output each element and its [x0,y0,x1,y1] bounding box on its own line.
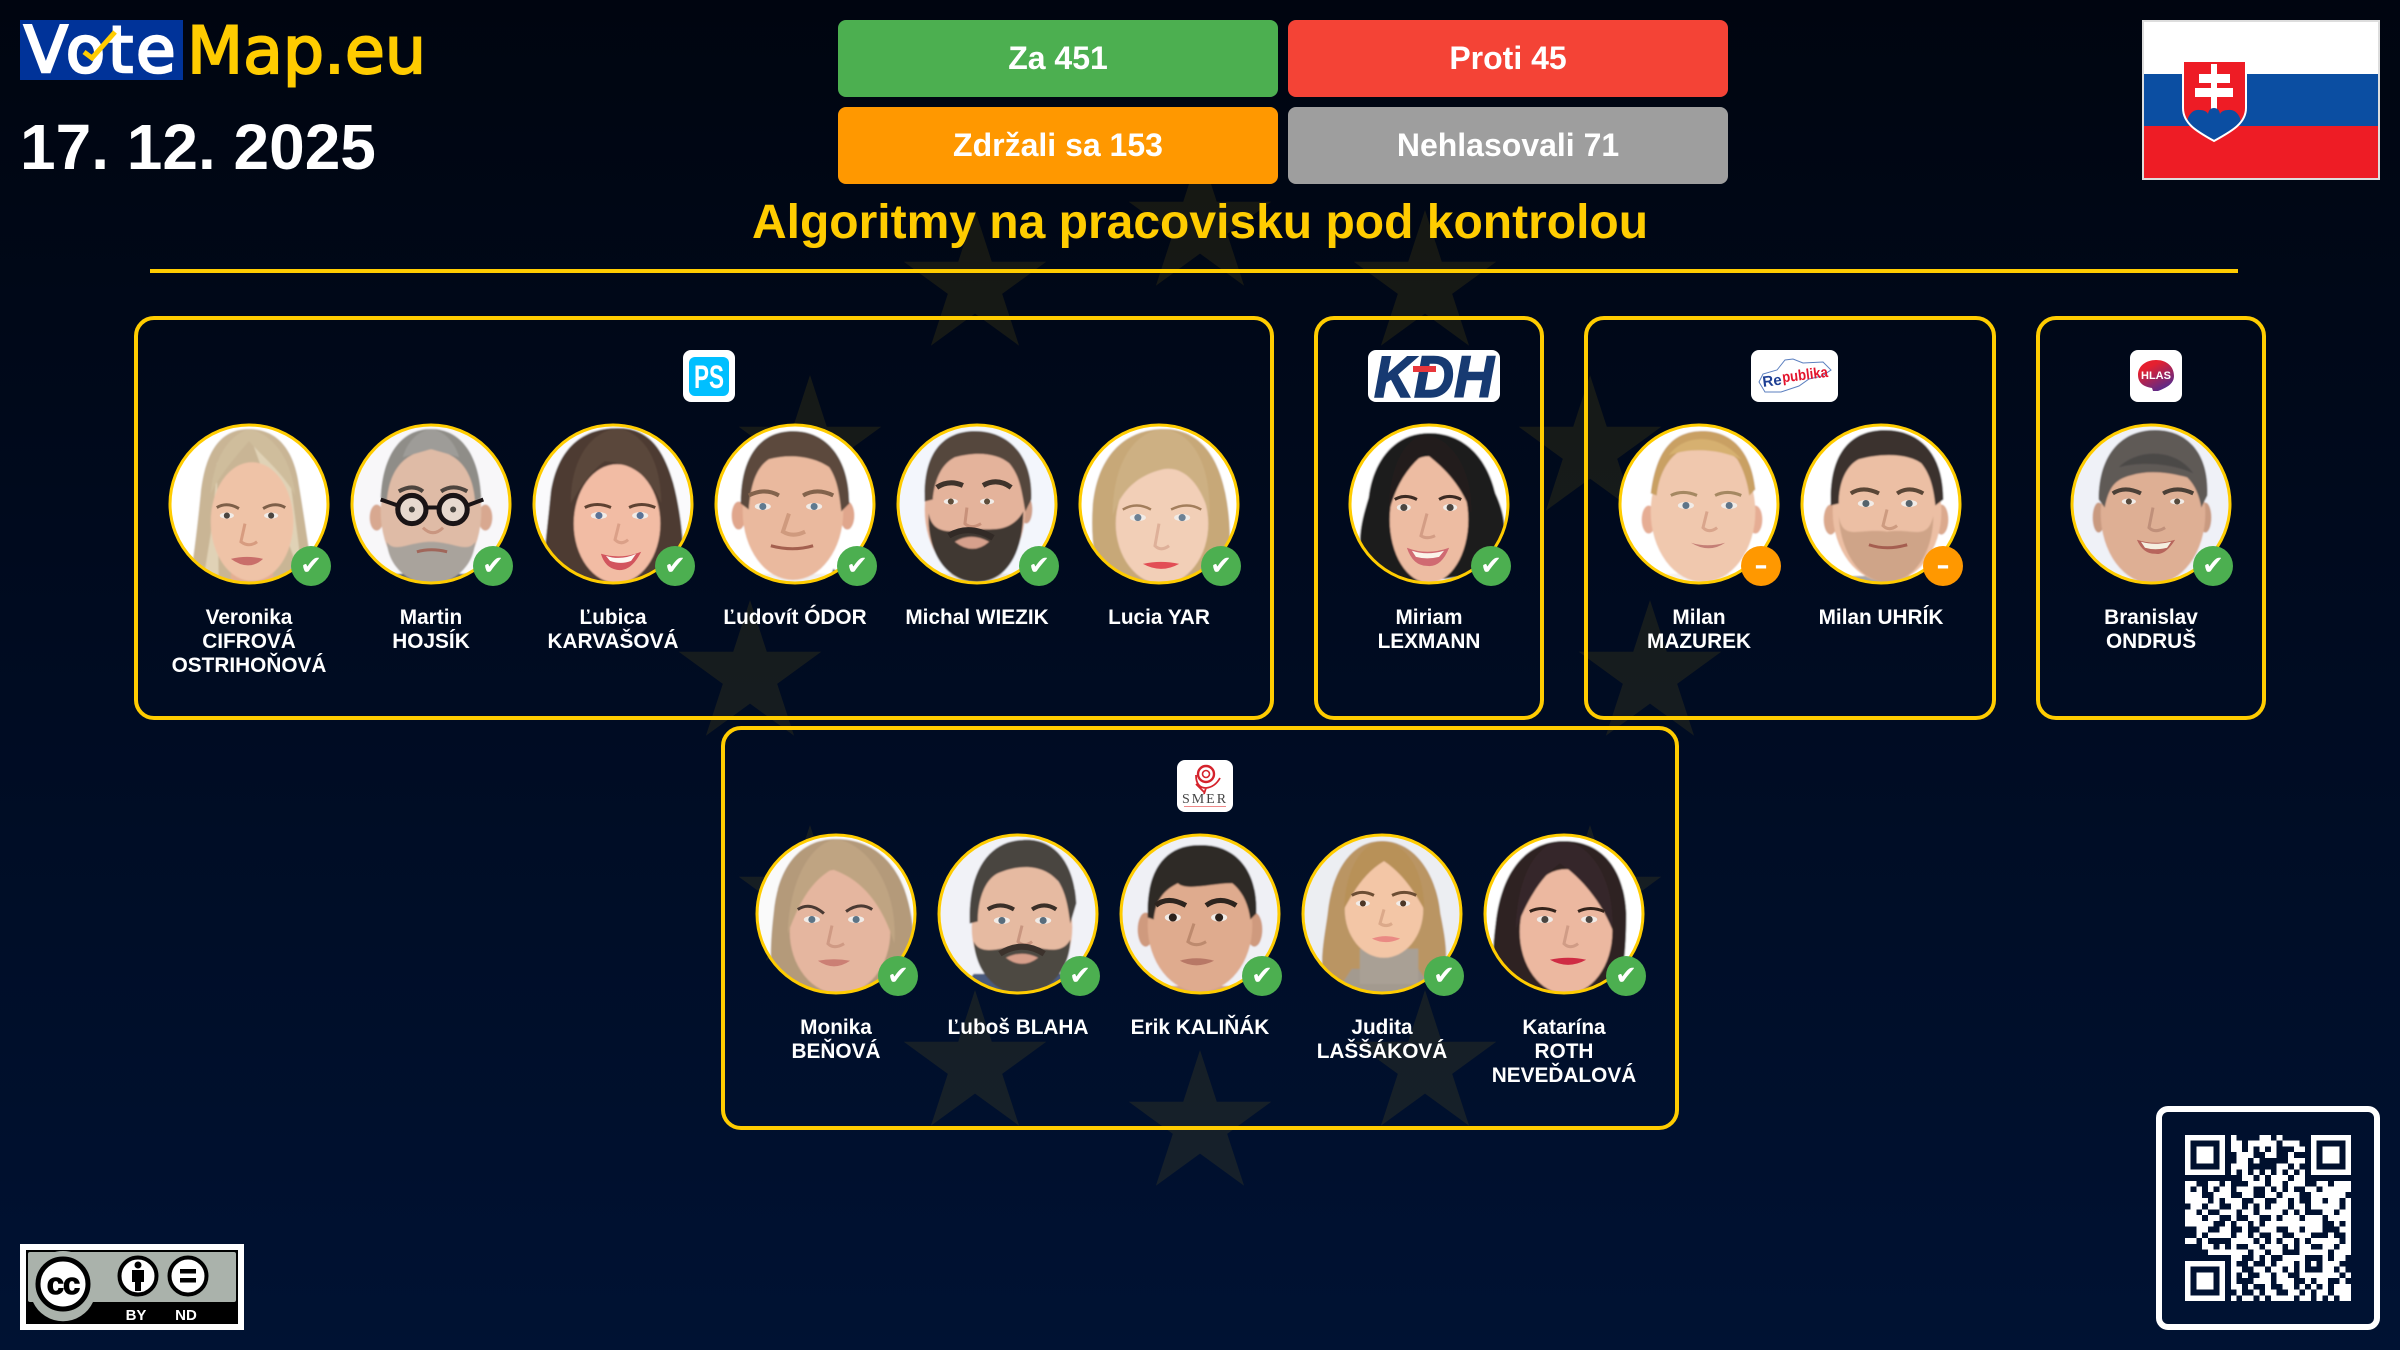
name: Milan UHRÍK [1819,606,1943,629]
name: Martin [400,606,462,629]
member: Milan Uhrík [1800,424,1963,629]
photo [1078,424,1240,584]
member: Monika Beňová [756,834,918,1063]
member: Milan Mazurek [1618,424,1781,653]
party logo: PS [683,350,735,402]
name: CIFROVÁ [202,630,296,653]
name: ONDRUŠ [2106,630,2196,653]
photo [1348,424,1510,584]
name: Michal WIEZIK [905,606,1049,629]
name [1492,1016,1636,1087]
party logo: Hlas: HLAS [2141,370,2171,382]
vote badge: for: ✔ [1480,551,1502,581]
vote badge: for: ✔ [664,551,686,581]
photo [1800,424,1962,584]
name: LAŠŠÁKOVÁ [1317,1040,1447,1063]
name [1317,1016,1447,1063]
member: Katarína Roth Neveďalová [1484,834,1646,1087]
name: Milan [1672,606,1726,629]
CC BY-ND licence badge [20,1244,244,1330]
name: Ľuboš BLAHA [948,1016,1088,1039]
button: for: Za 451 [1008,40,1108,76]
name: NEVEĎALOVÁ [1492,1064,1636,1087]
vote badge: for [473,546,513,586]
name: BEŇOVÁ [792,1040,880,1063]
name: Ľubica [579,606,647,629]
name: Monika [800,1016,872,1039]
name [392,606,470,653]
logo: VoteMap.eu: Vote [24,14,178,88]
vote badge: for: ✔ [300,551,322,581]
panel: Hlas [2036,316,2266,720]
photo [532,424,694,584]
vote badge: for [1019,546,1059,586]
name: Branislav [2104,606,2198,629]
name [792,1016,880,1063]
panel: PS [134,316,1274,720]
photo [168,424,330,584]
vote badge: for [291,546,331,586]
vote badge: abstained: – [1936,551,1950,581]
vote badge: for: ✔ [2202,551,2224,581]
vote badge: for [837,546,877,586]
vote badge: for: ✔ [887,961,909,991]
panel: Republika [1584,316,1996,720]
photo [896,424,1058,584]
member: Ľudovít Ódor [714,424,877,629]
member: Judita Laššáková [1302,834,1464,1063]
QR code [2156,1106,2380,1330]
vote badge: for: ✔ [482,551,504,581]
vote badge: for [655,546,695,586]
member: Erik Kaliňák [1120,834,1282,1039]
vote badge: abstained [1923,546,1963,586]
CC BY-ND licence badge: cc [47,1266,80,1301]
party logo: Smer: SMER [1182,792,1228,807]
vote badge: for [1606,956,1646,996]
name: Judita [1351,1016,1413,1039]
party logo: Smer [1177,760,1233,812]
photo [1120,834,1280,994]
button: for [838,20,1278,97]
name: Ľudovít ÓDOR [723,606,867,629]
divider rule [150,269,2238,273]
photo [1302,834,1462,994]
photo [350,424,512,584]
vote counts [838,20,1728,184]
vote badge: for [1471,546,1511,586]
member: Branislav Ondruš [2070,424,2233,653]
button: against: Proti 45 [1449,40,1567,76]
name: HOJSÍK [392,630,470,653]
vote badge: for: ✔ [1069,961,1091,991]
vote badge: for: ✔ [1615,961,1637,991]
name: ROTH [1535,1040,1593,1063]
member: Miriam Lexmann [1348,424,1511,653]
name: Erik KALIŇÁK [1131,1016,1269,1039]
vote badge: for: ✔ [1210,551,1232,581]
CC BY-ND licence badge: ND [175,1307,197,1324]
vote badge: for [1424,956,1464,996]
button: did not vote [1288,107,1728,184]
name [548,606,678,653]
button: abstained [838,107,1278,184]
logo: VoteMap.eu [20,14,426,89]
vote badge: abstained [1741,546,1781,586]
member: Ľubica Karvašová [532,424,695,653]
vote badge: for [878,956,918,996]
name: OSTRIHOŇOVÁ [172,654,326,677]
vote badge: for [1060,956,1100,996]
vote badge: for: ✔ [1251,961,1273,991]
member: Martin Hojsík [350,424,513,653]
member: Michal Wiezik [896,424,1059,629]
title: Algoritmy na pracovisku pod kontrolou [752,196,1648,249]
party logo: Republika [1751,350,1838,402]
name: MAZUREK [1647,630,1751,653]
name [1378,606,1480,653]
CC BY-ND licence badge: BY [126,1307,146,1324]
name: Veronika [206,606,292,629]
name: Katarína [1522,1016,1606,1039]
button: abstained: Zdržali sa 153 [953,127,1163,163]
name [2104,606,2198,653]
vote badge: for [1201,546,1241,586]
name: Miriam [1395,606,1463,629]
member: Lucia Yar [1078,424,1241,629]
panel: KDH [1314,316,1544,720]
vote badge: for: ✔ [1433,961,1455,991]
name: LEXMANN [1378,630,1480,653]
name [172,606,326,677]
button: against [1288,20,1728,97]
logo: VoteMap.eu: Map.eu [187,14,426,89]
photo [1484,834,1644,994]
date: 17. 12. 2025 [20,111,376,183]
name: KARVAŠOVÁ [548,630,678,653]
photo [2070,424,2232,584]
name: Lucia YAR [1108,606,1210,629]
party logo: Republika: Re [1762,372,1783,391]
photo [756,834,916,994]
vote badge: for: ✔ [1028,551,1050,581]
vote badge: for: ✔ [846,551,868,581]
member: Ľuboš Blaha [938,834,1100,1039]
party logo: Republika: publika [1781,364,1829,386]
vote badge: for [1242,956,1282,996]
party logo: Hlas [2130,350,2182,402]
panel: Smer [721,726,1679,1130]
member: Veronika Cifrová Ostrihoňová [168,424,331,677]
vote badge: abstained: – [1754,551,1768,581]
photo [938,834,1098,994]
photo [1618,424,1780,584]
name [1647,606,1751,653]
button: did not vote: Nehlasovali 71 [1397,127,1619,163]
photo [714,424,876,584]
vote badge: for [2193,546,2233,586]
flag of Slovakia [2142,20,2380,180]
